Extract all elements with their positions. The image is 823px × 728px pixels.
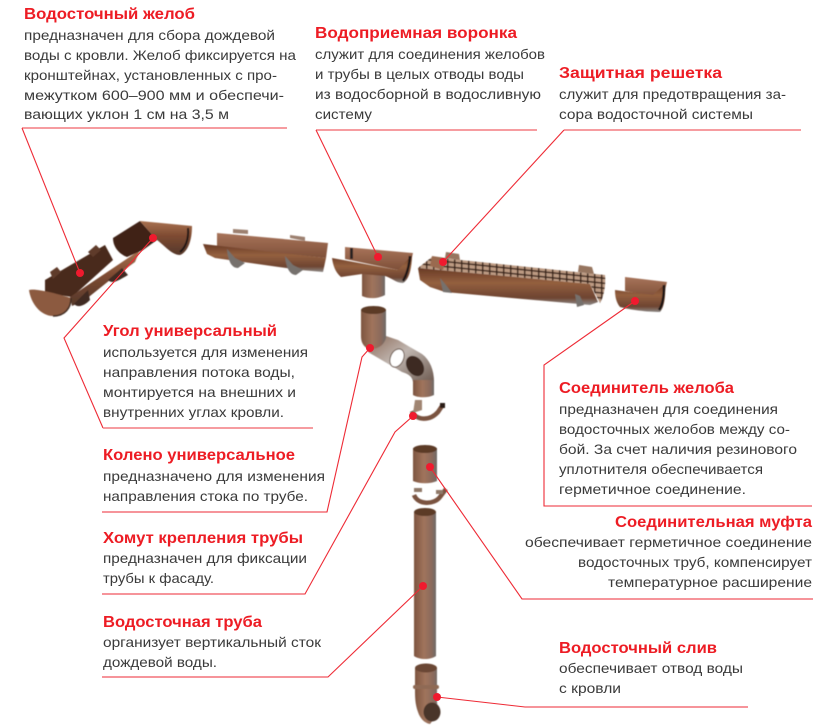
text block: elbow: [103, 447, 325, 504]
description: angle: [103, 344, 308, 420]
icon: cut gutter section: [29, 245, 140, 316]
icon: gutter with protective grille: [418, 252, 605, 307]
description: funnel: систему: [315, 106, 372, 122]
heading: gutter: Водосточный желоб: [24, 6, 195, 23]
description: funnel: и трубы в целых отводы воды: [315, 66, 524, 82]
description: elbow: предназначено для изменения: [103, 468, 325, 484]
icon: universal elbow: [361, 306, 434, 397]
description: elbow: направления стока по трубе.: [103, 488, 308, 504]
text block: funnel: [315, 25, 545, 122]
icon: straight gutter: [203, 229, 328, 275]
drawing: gutter system components: [29, 221, 667, 724]
description: funnel: [315, 46, 545, 122]
heading: coupling: Соединительная муфта: [615, 514, 812, 531]
description: angle: монтируется на внешних и: [103, 384, 296, 400]
description: gutter: [24, 27, 296, 122]
text block: gutter connector: [559, 380, 797, 497]
description: clamp: предназначен для фиксации: [103, 550, 307, 566]
description: gutter connector: уплотнителя обеспечивается: [559, 461, 763, 477]
heading: grille: Защитная решетка: [559, 65, 722, 82]
description: gutter: вающих уклон 1 см на 3,5 м: [24, 106, 229, 122]
description: coupling: обеспечивает герметичное соединение: [525, 534, 812, 550]
description: coupling: водосточных труб, компенсирует: [578, 554, 813, 570]
icon: pipe clamp: [412, 400, 445, 419]
icon: universal gutter angle: [113, 221, 192, 257]
description: clamp: трубы к фасаду.: [103, 570, 214, 586]
heading: angle: Угол универсальный: [103, 323, 277, 340]
icon: gutter connector: [615, 277, 667, 312]
text block: downpipe: [103, 614, 322, 670]
description: downpipe: [103, 634, 322, 670]
description: outlet: обеспечивает отвод воды: [559, 660, 743, 676]
text block: outlet: [559, 640, 743, 696]
text block: coupling: [525, 514, 813, 590]
description: downpipe: дождевой воды.: [103, 654, 217, 670]
heading: downpipe: Водосточная труба: [103, 614, 262, 631]
description: grille: служит для предотвращения за-: [559, 86, 786, 102]
description: gutter: предназначен для сбора дождевой: [24, 27, 275, 43]
description: angle: направления потока воды,: [103, 364, 295, 380]
heading: clamp: Хомут крепления трубы: [103, 530, 303, 547]
description: downpipe: организует вертикальный сток: [103, 634, 322, 650]
description: gutter connector: предназначен для соединения: [559, 401, 778, 417]
description: outlet: с кровли: [559, 680, 621, 696]
description: coupling: температурное расширение: [608, 574, 812, 590]
heading: funnel: Водоприемная воронка: [315, 25, 517, 42]
description: funnel: из водосборной в водосливную: [315, 86, 541, 102]
icon: funnel outlet: [332, 247, 413, 298]
heading: gutter connector: Соединитель желоба: [559, 380, 734, 397]
icon: pipe coupling: [413, 445, 446, 503]
description: clamp: [103, 550, 307, 586]
description: gutter: воды с кровли. Желоб фиксируется на: [24, 47, 296, 63]
description: grille: [559, 86, 786, 122]
description: gutter connector: бой. За счет наличия резинового: [559, 441, 797, 457]
description: angle: используется для изменения: [103, 344, 308, 360]
heading: elbow: Колено универсальное: [103, 447, 295, 464]
text block: gutter: [24, 6, 296, 122]
description: gutter: межутком 600–900 мм и обеспечи-: [24, 87, 284, 103]
marker dots: [76, 234, 639, 701]
description: gutter: кронштейнах, установленных с про-: [24, 67, 277, 83]
icon: downpipe: [414, 508, 436, 659]
description: elbow: [103, 468, 325, 504]
description: outlet: [559, 660, 743, 696]
description: gutter connector: [559, 401, 797, 497]
text block: angle: [103, 323, 308, 420]
text block: clamp: [103, 530, 307, 586]
description: funnel: служит для соединения желобов: [315, 46, 545, 62]
description: angle: внутренних углах кровли.: [103, 404, 284, 420]
text block: grille: [559, 65, 786, 122]
heading: outlet: Водосточный слив: [559, 640, 717, 657]
leader lines: [22, 128, 813, 707]
icon: downpipe outlet: [413, 664, 440, 724]
description: gutter connector: водосточных желобов между со-: [559, 421, 790, 437]
description: gutter connector: герметичное соединение.: [559, 481, 746, 497]
description: grille: сора водосточной системы: [559, 106, 753, 122]
description: coupling: [525, 534, 813, 590]
